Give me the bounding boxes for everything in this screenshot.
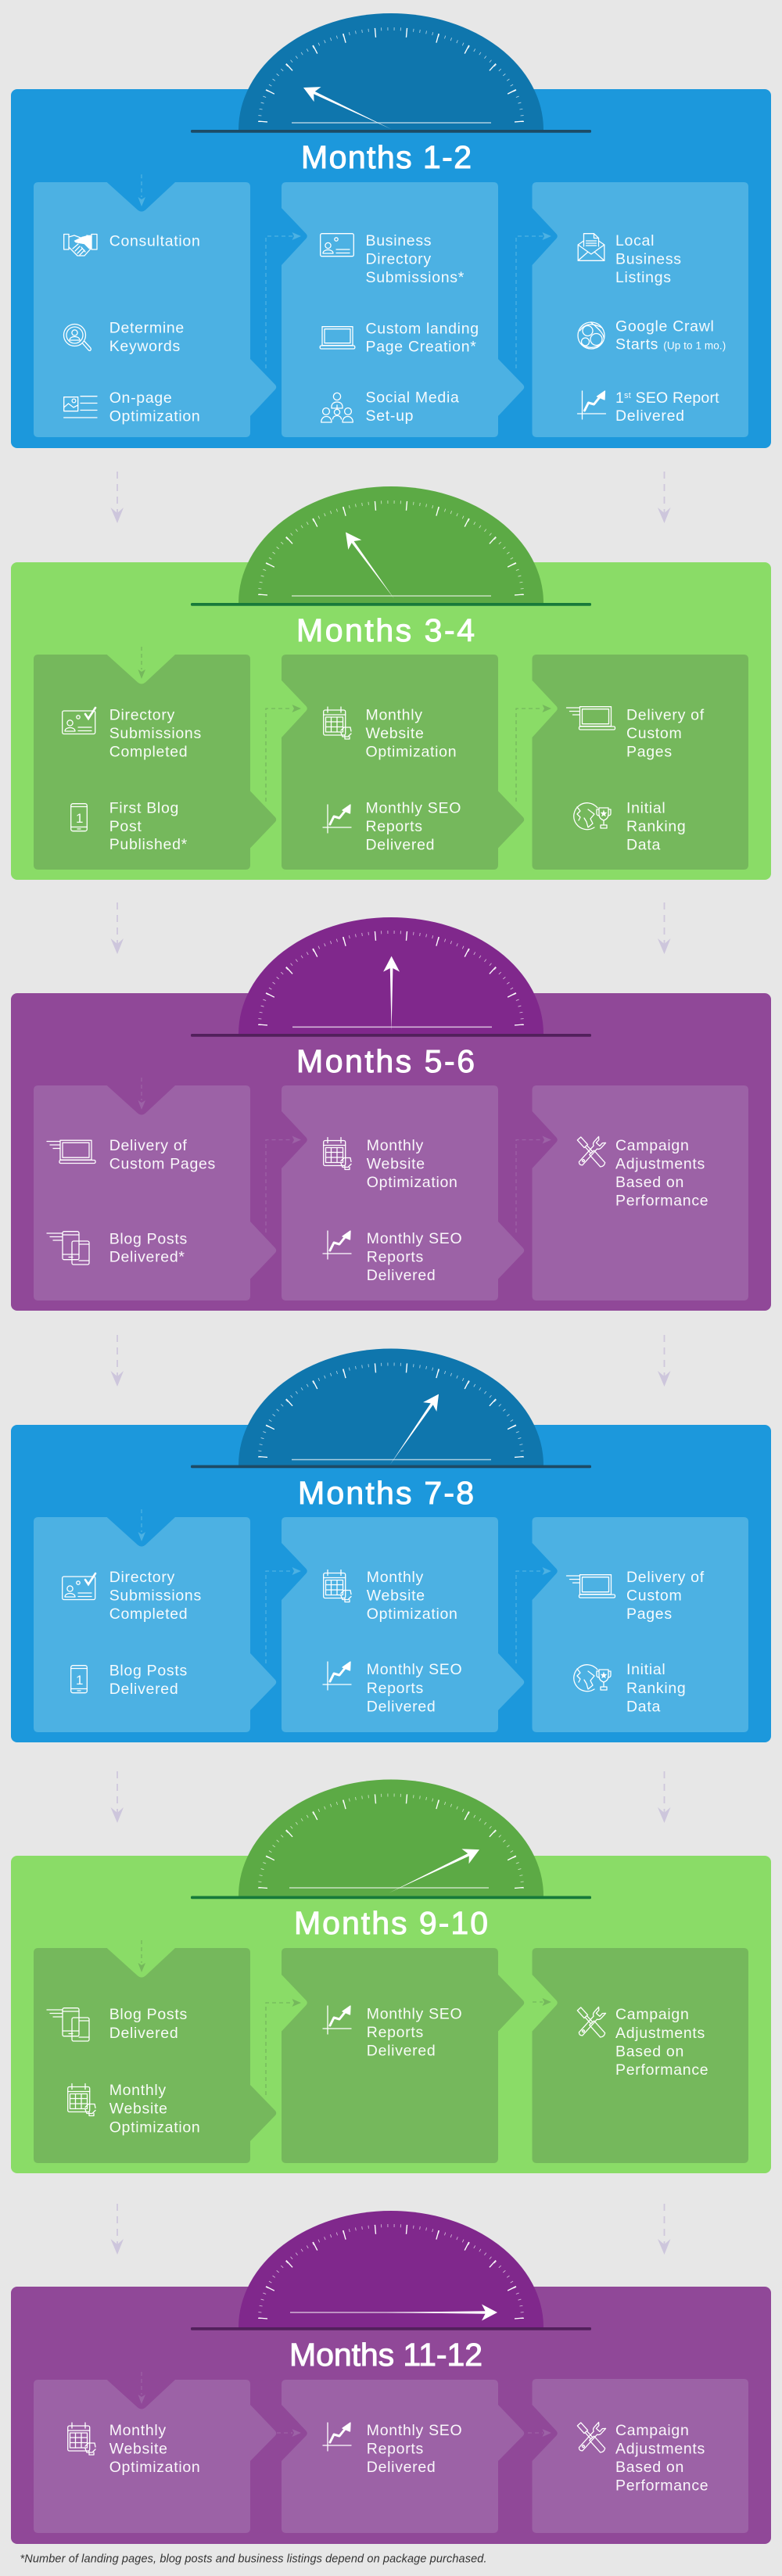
arrows: Months 1-2 to 3-4 xyxy=(111,472,671,523)
Blog Posts Delivered item: Blog Posts xyxy=(109,1663,188,1680)
Campaign Adjustments item: Campaign xyxy=(615,1137,689,1154)
Campaign Adjustments item: Campaign xyxy=(615,2006,689,2023)
Custom landing Page Creation item xyxy=(320,320,479,356)
Campaign Adjustments item: Performance xyxy=(615,2061,708,2079)
Delivery of Custom Pages item: Delivery of xyxy=(626,1569,705,1586)
gauge: Months 5-6 xyxy=(191,917,591,1037)
section: Months 1-2 xyxy=(11,13,771,448)
panel: Months 1-2 xyxy=(11,89,771,448)
Custom landing Page Creation item: Page Creation* xyxy=(366,339,477,356)
Social Media Set-up item: Social Media xyxy=(366,389,460,407)
gauge: Months 3-4 xyxy=(191,486,591,606)
Monthly Website Optimization item: Website xyxy=(367,1156,425,1173)
Directory Submissions Completed item: Directory xyxy=(109,1569,175,1586)
arrows: Months 7-8 to 9-10 xyxy=(111,1771,671,1823)
Directory Submissions Completed item: Completed xyxy=(109,1606,188,1623)
Monthly SEO Reports Delivered item: Reports xyxy=(367,2441,424,2458)
1st SEO Report Delivered item: 1 xyxy=(615,389,624,407)
Monthly SEO Reports Delivered item: Monthly SEO xyxy=(366,799,461,816)
Campaign Adjustments item xyxy=(576,2422,708,2495)
Business Directory Submissions item: Submissions* xyxy=(366,269,465,286)
Monthly Website Optimization item: Monthly xyxy=(367,1569,424,1586)
Monthly Website Optimization item xyxy=(68,2422,200,2476)
Campaign Adjustments item: Performance xyxy=(615,2477,708,2495)
Campaign Adjustments item: Adjustments xyxy=(615,1156,705,1173)
arrows: Months 3-4 to 5-6 xyxy=(111,902,671,954)
Initial Ranking Data item: Ranking xyxy=(626,818,686,835)
Monthly Website Optimization item xyxy=(324,1137,458,1191)
section: Months 11-12 xyxy=(11,2211,771,2544)
Monthly SEO Reports Delivered item: Reports xyxy=(366,818,423,835)
panel: Months 3-4 xyxy=(11,562,771,880)
Monthly Website Optimization item: Website xyxy=(109,2101,168,2118)
gauge: Months 7-8 xyxy=(191,1348,591,1469)
card 3 xyxy=(532,1517,748,1732)
Business Directory Submissions item: Directory xyxy=(366,250,432,267)
panel: Months 9-10 xyxy=(11,1856,771,2173)
Monthly SEO Reports Delivered item: Reports xyxy=(367,2024,424,2041)
section: Months 5-6 xyxy=(11,917,771,1311)
Monthly Website Optimization item: Monthly xyxy=(366,707,423,724)
Directory Submissions Completed item: Submissions xyxy=(109,1588,202,1605)
Campaign Adjustments item: Based on xyxy=(615,1174,684,1191)
Monthly Website Optimization item xyxy=(324,707,457,761)
card 3 xyxy=(532,655,748,870)
Consultation item: Consultation xyxy=(109,232,201,249)
Blog Posts Delivered item: 1 xyxy=(76,1673,83,1688)
1st SEO Report Delivered item xyxy=(577,389,719,425)
Delivery of Custom Pages item: Custom xyxy=(626,1588,682,1605)
Monthly SEO Reports Delivered item: Delivered xyxy=(367,1699,436,1716)
Campaign Adjustments item: Based on xyxy=(615,2459,684,2476)
card 1 xyxy=(34,1078,301,1301)
section: Months 7-8 xyxy=(11,1348,771,1742)
Blog Posts Delivered item xyxy=(47,1230,188,1266)
Monthly Website Optimization item: Website xyxy=(366,725,424,742)
1st SEO Report Delivered item: st xyxy=(624,391,631,400)
gauge: Months 1-2 xyxy=(191,13,591,136)
card 3 xyxy=(532,182,748,437)
Monthly SEO Reports Delivered item: Monthly SEO xyxy=(367,1661,462,1678)
Monthly Website Optimization item: Optimization xyxy=(366,744,457,761)
Campaign Adjustments item: Based on xyxy=(615,2043,684,2060)
Monthly Website Optimization item xyxy=(68,2082,200,2137)
Initial Ranking Data item: Data xyxy=(626,1699,661,1716)
title: Months 11-12: Months 11-12 xyxy=(289,2337,482,2373)
Social Media Set-up item: Set-up xyxy=(366,407,414,425)
Monthly SEO Reports Delivered item xyxy=(323,2422,462,2476)
gauge: Months 11-12 xyxy=(191,2211,591,2330)
Delivery of Custom Pages item: Pages xyxy=(626,744,673,761)
footnote: *Number of landing pages, blog posts and business listings depend on package purchased. xyxy=(20,2553,486,2566)
Monthly SEO Reports Delivered item: Delivered xyxy=(367,1267,436,1284)
card 2 xyxy=(282,655,551,870)
section: Months 3-4 xyxy=(11,486,771,880)
1st SEO Report Delivered item: Delivered xyxy=(615,407,685,425)
Monthly Website Optimization item xyxy=(324,1569,458,1623)
Monthly Website Optimization item: Monthly xyxy=(109,2422,167,2439)
Monthly Website Optimization item: Optimization xyxy=(109,2459,200,2476)
gauge: Months 9-10 xyxy=(191,1780,591,1900)
title: Months 5-6: Months 5-6 xyxy=(296,1043,475,1079)
card 1 xyxy=(34,1509,301,1732)
Campaign Adjustments item: Adjustments xyxy=(615,2441,705,2458)
Delivery of Custom Pages item: Pages xyxy=(626,1606,673,1623)
Google Crawl Starts item xyxy=(578,318,726,353)
panel: Months 11-12 xyxy=(11,2287,771,2544)
arrows: Months 5-6 to 7-8 xyxy=(111,1335,671,1387)
On-page Optimization item xyxy=(64,389,200,425)
Determine Keywords item xyxy=(64,320,185,355)
Delivery of Custom Pages item: Delivery of xyxy=(626,707,705,724)
First Blog Post Published item: First Blog xyxy=(109,799,179,816)
Determine Keywords item: Keywords xyxy=(109,338,181,355)
Delivery of Custom Pages item: Custom xyxy=(626,725,682,742)
card 1 xyxy=(34,647,301,870)
On-page Optimization item: On-page xyxy=(109,389,172,407)
card 3 xyxy=(532,1085,748,1301)
Initial Ranking Data item xyxy=(574,1661,686,1716)
card 1 xyxy=(34,2372,301,2533)
Delivery of Custom Pages item xyxy=(47,1137,216,1172)
Blog Posts Delivered item: Blog Posts xyxy=(109,1230,188,1247)
Monthly Website Optimization item: Monthly xyxy=(109,2082,167,2099)
Monthly SEO Reports Delivered item: Reports xyxy=(367,1680,424,1697)
Monthly SEO Reports Delivered item: Monthly SEO xyxy=(367,1230,462,1247)
card 2 xyxy=(282,2380,551,2533)
card 2 xyxy=(282,1517,551,1732)
On-page Optimization item: Optimization xyxy=(109,407,200,425)
title: Months 7-8: Months 7-8 xyxy=(298,1475,474,1511)
Monthly Website Optimization item: Website xyxy=(109,2441,168,2458)
First Blog Post Published item: Published* xyxy=(109,836,188,853)
panel: Months 7-8 xyxy=(11,1425,771,1742)
Local Business Listings item: Local xyxy=(615,232,655,249)
card 2 xyxy=(282,1948,551,2163)
Consultation item xyxy=(64,232,201,256)
Delivery of Custom Pages item xyxy=(566,1569,705,1623)
Blog Posts Delivered item: Delivered xyxy=(109,1681,178,1698)
Google Crawl Starts item: Starts (Up to 1 mo.) xyxy=(615,336,726,353)
First Blog Post Published item: Post xyxy=(109,818,142,835)
Delivery of Custom Pages item: Delivery of xyxy=(109,1137,188,1154)
Monthly SEO Reports Delivered item: Monthly SEO xyxy=(367,2422,462,2439)
Social Media Set-up item xyxy=(321,389,460,425)
Monthly SEO Reports Delivered item xyxy=(323,1661,462,1716)
Blog Posts Delivered item xyxy=(71,1663,188,1698)
arrows: Months 9-10 to 11-12 xyxy=(111,2204,671,2255)
Campaign Adjustments item xyxy=(576,1136,708,1209)
Campaign Adjustments item: Adjustments xyxy=(615,2025,705,2042)
Monthly SEO Reports Delivered item: Delivered xyxy=(367,2459,436,2476)
Monthly Website Optimization item: Website xyxy=(367,1588,425,1605)
Directory Submissions Completed item xyxy=(63,1569,202,1623)
1st SEO Report Delivered item: SEO Report xyxy=(631,389,719,407)
card 2 xyxy=(282,182,551,437)
Initial Ranking Data item: Data xyxy=(626,837,661,854)
Monthly Website Optimization item: Optimization xyxy=(367,1606,458,1623)
Monthly SEO Reports Delivered item: Delivered xyxy=(366,837,435,854)
title: Months 3-4: Months 3-4 xyxy=(296,612,475,648)
First Blog Post Published item: 1 xyxy=(76,811,83,826)
Initial Ranking Data item xyxy=(574,799,686,854)
Monthly SEO Reports Delivered item: Reports xyxy=(367,1248,424,1265)
Initial Ranking Data item: Initial xyxy=(626,799,665,816)
title: Months 1-2: Months 1-2 xyxy=(301,139,472,175)
card 3 xyxy=(532,2379,748,2533)
Directory Submissions Completed item: Completed xyxy=(109,744,188,761)
Blog Posts Delivered item xyxy=(47,2006,188,2042)
card 1 xyxy=(34,1940,301,2163)
Directory Submissions Completed item xyxy=(63,707,202,761)
Monthly Website Optimization item: Optimization xyxy=(367,1174,458,1191)
Business Directory Submissions item: Business xyxy=(366,232,432,249)
Monthly Website Optimization item: Monthly xyxy=(367,1137,424,1154)
card 3 xyxy=(532,1948,748,2163)
section: Months 9-10 xyxy=(11,1780,771,2173)
Local Business Listings item: Business xyxy=(615,250,682,267)
Determine Keywords item: Determine xyxy=(109,320,185,337)
card 1 xyxy=(34,174,301,437)
Blog Posts Delivered item: Delivered* xyxy=(109,1249,185,1266)
Initial Ranking Data item: Ranking xyxy=(626,1680,686,1697)
Blog Posts Delivered item: Blog Posts xyxy=(109,2006,188,2023)
Local Business Listings item: Listings xyxy=(615,269,672,286)
Campaign Adjustments item xyxy=(576,2006,708,2079)
Monthly Website Optimization item: Optimization xyxy=(109,2119,200,2137)
card 2 xyxy=(282,1085,551,1301)
Monthly SEO Reports Delivered item xyxy=(323,799,461,854)
Delivery of Custom Pages item: Custom Pages xyxy=(109,1155,216,1172)
Delivery of Custom Pages item xyxy=(566,707,705,761)
title: Months 9-10: Months 9-10 xyxy=(294,1905,488,1941)
Directory Submissions Completed item: Directory xyxy=(109,707,175,724)
Monthly SEO Reports Delivered item: Delivered xyxy=(367,2043,436,2060)
Monthly SEO Reports Delivered item xyxy=(323,2006,462,2060)
Custom landing Page Creation item: Custom landing xyxy=(366,320,479,337)
Initial Ranking Data item: Initial xyxy=(626,1661,665,1678)
Blog Posts Delivered item: Delivered xyxy=(109,2025,178,2042)
Monthly SEO Reports Delivered item xyxy=(323,1230,462,1284)
Campaign Adjustments item: Campaign xyxy=(615,2422,689,2439)
Google Crawl Starts item: Google Crawl xyxy=(615,318,715,335)
Monthly SEO Reports Delivered item: Monthly SEO xyxy=(367,2006,462,2023)
Local Business Listings item xyxy=(578,232,682,286)
Directory Submissions Completed item: Submissions xyxy=(109,725,202,742)
Business Directory Submissions item xyxy=(321,232,465,286)
Campaign Adjustments item: Performance xyxy=(615,1192,708,1209)
First Blog Post Published item xyxy=(71,799,188,853)
panel: Months 5-6 xyxy=(11,993,771,1311)
